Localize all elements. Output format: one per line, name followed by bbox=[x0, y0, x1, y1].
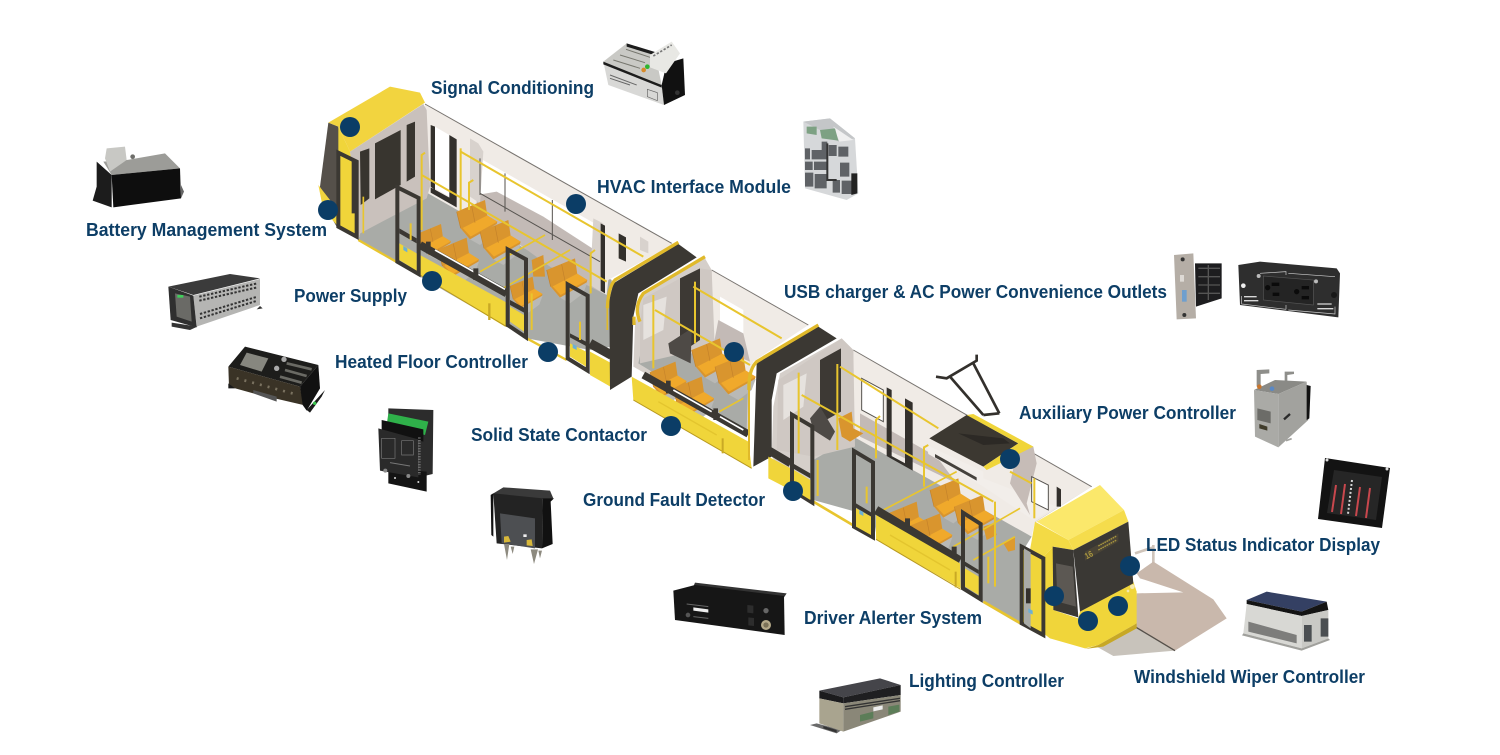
tram cutaway illustration bbox=[318, 87, 1227, 656]
icon: HVAC interface module bbox=[803, 118, 858, 200]
handrails bbox=[411, 148, 643, 340]
location markers bbox=[318, 117, 1140, 631]
label: Solid State Contactor: Solid State Contactor bbox=[471, 425, 647, 445]
label: Lighting Controller: Lighting Controller bbox=[909, 671, 1064, 691]
doors bbox=[792, 415, 981, 599]
front cab bbox=[1022, 485, 1137, 649]
articulation joint 1 bbox=[607, 242, 697, 390]
icon: battery management system unit bbox=[93, 147, 184, 207]
icon: heated floor controller bbox=[228, 347, 325, 413]
label: USB charger & AC Power Convenience Outlets: USB charger & AC Power Convenience Outlets bbox=[784, 282, 1167, 302]
label: Ground Fault Detector: Ground Fault Detector bbox=[583, 490, 765, 510]
label: Battery Management System: Battery Management System bbox=[86, 220, 327, 240]
icon: AC power convenience outlet bbox=[1238, 262, 1340, 317]
ground shadow bbox=[1097, 545, 1227, 656]
label: Windshield Wiper Controller: Windshield Wiper Controller bbox=[1134, 667, 1365, 687]
icon: solid state contactor bbox=[378, 408, 433, 492]
icon: power supply bbox=[168, 274, 263, 330]
icon: windshield wiper controller bbox=[1242, 592, 1330, 651]
doors bbox=[397, 187, 588, 371]
label: Signal Conditioning: Signal Conditioning bbox=[431, 78, 594, 98]
articulation joint 2 bbox=[749, 325, 837, 467]
label: HVAC Interface Module: HVAC Interface Module bbox=[597, 177, 791, 197]
icon: ground fault detector bbox=[491, 487, 554, 564]
destination display bbox=[1083, 533, 1118, 561]
roof-mounted module and pantograph bbox=[929, 355, 1033, 470]
icon: LED status indicator display bbox=[1318, 458, 1390, 528]
icon: lighting controller bbox=[810, 678, 901, 733]
label: Auxiliary Power Controller: Auxiliary Power Controller bbox=[1019, 403, 1236, 423]
icon: driver alerter system bbox=[673, 583, 787, 635]
icon: USB charger module bbox=[1174, 253, 1222, 319]
destination display: 16 bbox=[1083, 549, 1095, 561]
icon: signal conditioning module bbox=[603, 42, 685, 105]
label: LED Status Indicator Display: LED Status Indicator Display bbox=[1146, 535, 1380, 555]
label: Driver Alerter System: Driver Alerter System bbox=[804, 608, 982, 628]
rear car section bbox=[318, 87, 673, 387]
front car section bbox=[768, 338, 1137, 649]
icon: auxiliary power controller bbox=[1254, 369, 1311, 447]
driver cab rear bbox=[318, 87, 425, 237]
label: Power Supply: Power Supply bbox=[294, 286, 407, 306]
label: Heated Floor Controller: Heated Floor Controller bbox=[335, 352, 528, 372]
middle car section bbox=[632, 257, 808, 468]
